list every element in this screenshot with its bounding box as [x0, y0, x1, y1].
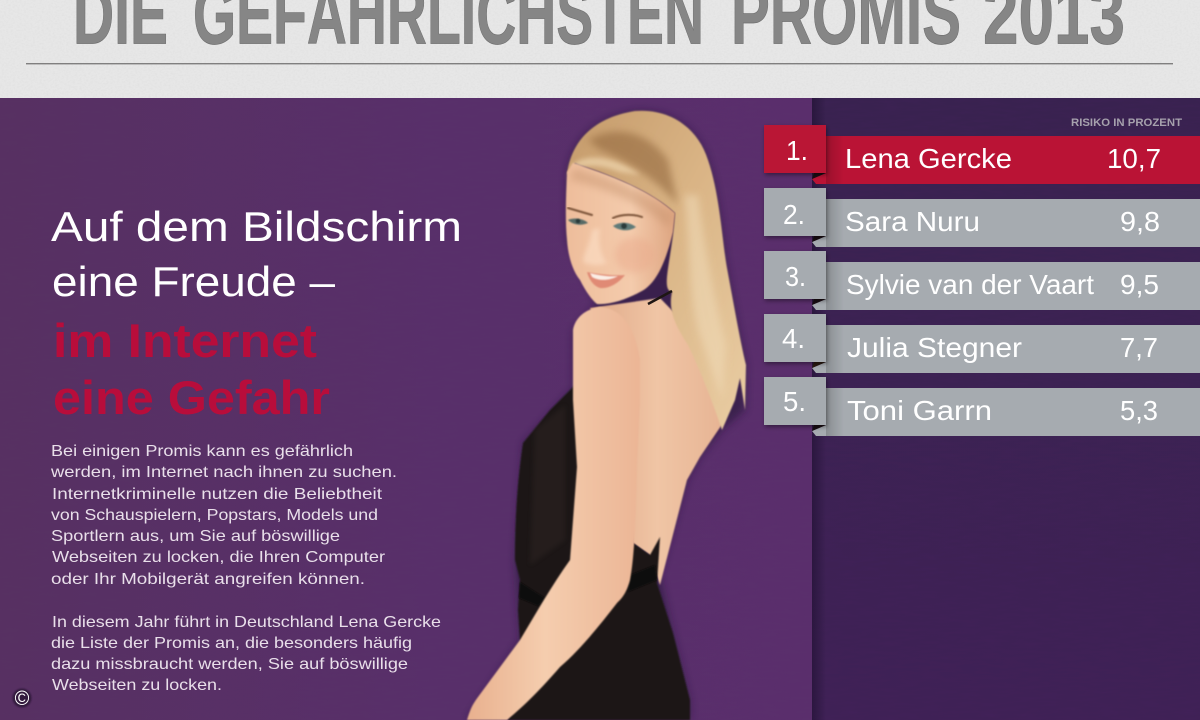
- face shade under fringe: [570, 168, 669, 223]
- body text: Internetkriminelle nutzen die Beliebtheit: [52, 486, 383, 503]
- body text: Bei einigen Promis kann es gefährlich: [51, 443, 353, 460]
- ranking row 2: Sara Nuru: [845, 206, 980, 237]
- headline: eine Gefahr: [53, 371, 330, 424]
- back: [590, 298, 725, 585]
- ranking row 3: 3.: [785, 261, 806, 292]
- panel: right dark ranking background: [812, 98, 1200, 720]
- hair light fringe streak: [572, 158, 640, 175]
- eyebrows: [568, 208, 642, 218]
- headline: [51, 203, 462, 424]
- cheek blush: [616, 238, 650, 272]
- neck strap: [648, 291, 672, 304]
- body text: [50, 443, 441, 694]
- ranking row 3: Sylvie van der Vaart: [846, 269, 1094, 300]
- body text: Webseiten zu locken.: [52, 677, 222, 694]
- ranking row 1: 10,7: [1107, 143, 1161, 174]
- ranking row 5: Toni Garrn: [847, 395, 992, 426]
- headline: eine Freude –: [52, 258, 336, 305]
- body text: von Schauspielern, Popstars, Models und: [51, 507, 378, 524]
- ranking row 4: 4.: [782, 323, 805, 354]
- ranking row 1: [764, 125, 1200, 184]
- ranking row 4: 7,7: [1120, 332, 1158, 363]
- risk column header: RISIKO IN PROZENT: [1071, 117, 1182, 129]
- ranking row 5: 5,3: [1120, 395, 1158, 426]
- lips: [587, 272, 625, 288]
- ranking row 2: 9,8: [1120, 206, 1160, 237]
- title rule: [26, 63, 1173, 64]
- ranking row 3: [764, 251, 1200, 310]
- body text: Sportlern aus, um Sie auf böswillige: [51, 528, 340, 545]
- ranking row 5: [764, 377, 1200, 436]
- arm: [467, 307, 640, 720]
- ranking row 4: Julia Stegner: [847, 332, 1022, 363]
- body text: Webseiten zu locken, die Ihren Computer: [52, 549, 386, 566]
- headline: Auf dem Bildschirm: [51, 203, 462, 250]
- hair dark streaks: [588, 132, 678, 205]
- eyes: [568, 219, 636, 230]
- ranking row 1: Lena Gercke: [845, 143, 1012, 174]
- ranking row 3: 9,5: [1120, 269, 1159, 300]
- body text: In diesem Jahr führt in Deutschland Lena Gercke: [52, 614, 441, 631]
- ranking row 5: 5.: [783, 386, 806, 417]
- photo: woman in black dress: [467, 111, 746, 720]
- ranking row 2: [764, 188, 1200, 247]
- nose shade: [583, 228, 607, 265]
- headline: im Internet: [53, 314, 317, 367]
- ranking row 4: [764, 314, 1200, 373]
- dress belt: [519, 565, 657, 606]
- body text: oder Ihr Mobilgerät angreifen können.: [51, 571, 365, 588]
- face: [566, 163, 675, 304]
- teeth: [590, 273, 618, 280]
- body text: die Liste der Promis an, die besonders häufig: [51, 635, 412, 652]
- ranking row 1: 1.: [786, 135, 808, 166]
- background: paper header band: [0, 0, 1200, 98]
- panel: left purple: [0, 98, 812, 720]
- dress: [507, 385, 690, 720]
- dress sheen: [534, 414, 561, 556]
- copyright mark: ©: [15, 688, 30, 710]
- hair: [567, 111, 746, 430]
- ranking row 2: 2.: [783, 199, 805, 230]
- hair highlights: [684, 195, 726, 400]
- body text: dazu missbraucht werden, Sie auf böswillige: [51, 656, 408, 673]
- body text: werden, im Internet nach ihnen zu suchen.: [50, 464, 397, 481]
- photo glow shadow: [504, 108, 748, 718]
